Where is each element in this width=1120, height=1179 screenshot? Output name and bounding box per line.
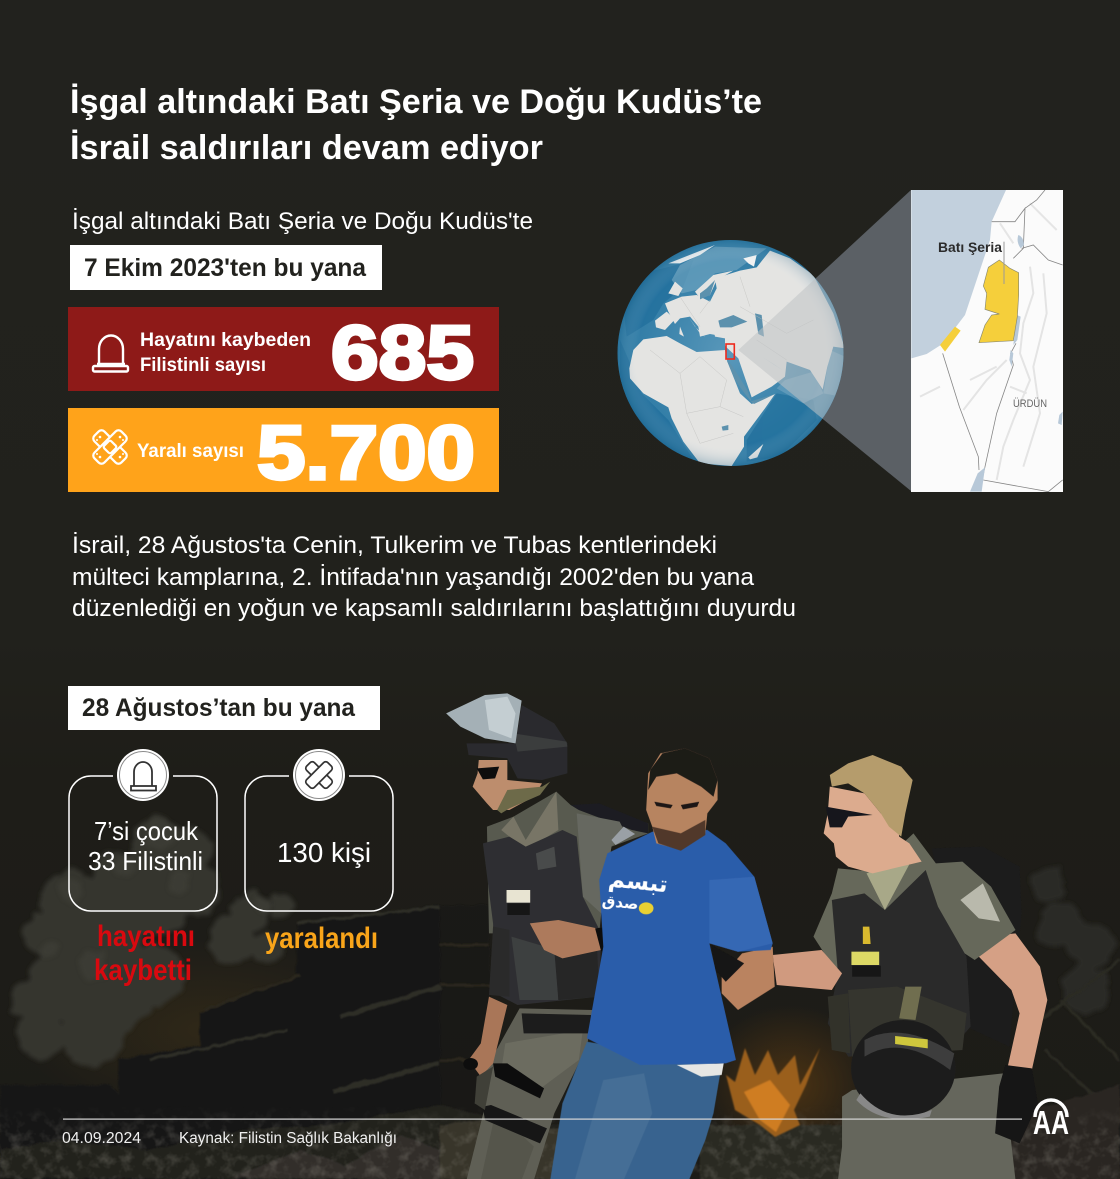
footer source: Kaynak: Filistin Sağlık Bakanlığı	[179, 1130, 397, 1147]
West Bank	[979, 260, 1019, 343]
text: injured caption: yaralandı	[265, 922, 378, 955]
text: deaths label: Hayatını kaybeden	[140, 330, 311, 351]
date label: 7 Ekim	[70, 245, 382, 290]
text: killed count	[88, 816, 203, 876]
map borders	[943, 190, 1063, 492]
title: İşgal altındaki Batı Şeria ve Doğu Kudüs’te	[70, 83, 762, 121]
locator rectangle	[726, 344, 734, 359]
icon: siren badge	[117, 749, 169, 801]
globe	[618, 240, 844, 466]
map lakes	[970, 235, 1063, 492]
text: killed caption: hayatını	[97, 920, 195, 953]
footer line	[63, 1118, 1022, 1120]
logo: AA: AA	[1033, 1104, 1069, 1141]
map: West Bank and surroundings	[911, 190, 1063, 492]
icon: bandage	[92, 429, 128, 465]
photo cut-out: right soldier	[773, 755, 1047, 1179]
decorative fire blast	[726, 1048, 820, 1137]
paragraph: İsrail, 28 Ağustos'ta Cenin, Tulkerim ve Tubas kentlerindeki	[72, 532, 717, 559]
text: deaths label	[140, 330, 311, 376]
text: injured label: Yaralı sayısı	[137, 441, 244, 462]
photo cut-out: left soldier	[446, 693, 648, 1179]
text: killed count: 33 Filistinli	[88, 846, 203, 876]
background scene: smoke and ruined buildings	[0, 818, 1120, 1179]
subtitle: İşgal altındaki Batı Şeria ve Doğu Kudüs'te	[72, 208, 533, 235]
paragraph: düzenlediği en yoğun ve kapsamlı saldırılarını başlattığını duyurdu	[72, 595, 796, 622]
Gaza	[940, 327, 961, 352]
date label: 7 Ekim: 7 Ekim 2023'ten bu yana	[84, 254, 367, 282]
card: injured	[245, 749, 393, 911]
text: killed count: 7’si çocuk	[94, 816, 199, 846]
highlighted wedge over globe	[738, 278, 844, 418]
icon: siren	[93, 336, 128, 372]
map label: Batı Şeria: Batı Şeria	[938, 239, 1002, 255]
card: killed	[69, 749, 217, 911]
text on shirt: تبسم	[607, 866, 669, 898]
title	[70, 83, 762, 167]
map sea	[911, 190, 1006, 358]
leader line	[1004, 242, 1005, 284]
text: injured count: 130 kişi	[277, 837, 371, 868]
map label: Ürdün: ÜRDÜN	[1013, 398, 1047, 410]
text: deaths label: Filistinli sayısı	[140, 355, 266, 376]
text on shirt	[601, 866, 669, 916]
text on shirt: صدق	[601, 892, 639, 913]
logo: AA	[1033, 1100, 1069, 1141]
number: 685: 685	[331, 311, 474, 396]
paragraph	[72, 532, 796, 622]
icon: bandage badge	[293, 749, 345, 801]
text: killed caption: kaybetti	[94, 954, 192, 987]
paragraph: mülteci kamplarına, 2. İntifada'nın yaşandığı 2002'den bu yana	[72, 564, 755, 591]
photo cut-out: detained man	[550, 748, 775, 1179]
panel: deaths	[68, 307, 499, 396]
panel: injured	[68, 408, 499, 496]
date label: 28 Ağustos	[68, 686, 380, 730]
text: killed caption	[94, 920, 195, 987]
footer date: 04.09.2024	[62, 1130, 141, 1147]
number: 5.700: 5.700	[257, 411, 475, 496]
zoom wedge from globe to map	[738, 190, 911, 491]
date label: 28 Ağustos: 28 Ağustos’tan bu yana	[82, 694, 356, 722]
map relief	[920, 203, 1057, 480]
title: İsrail saldırıları devam ediyor	[70, 129, 543, 167]
